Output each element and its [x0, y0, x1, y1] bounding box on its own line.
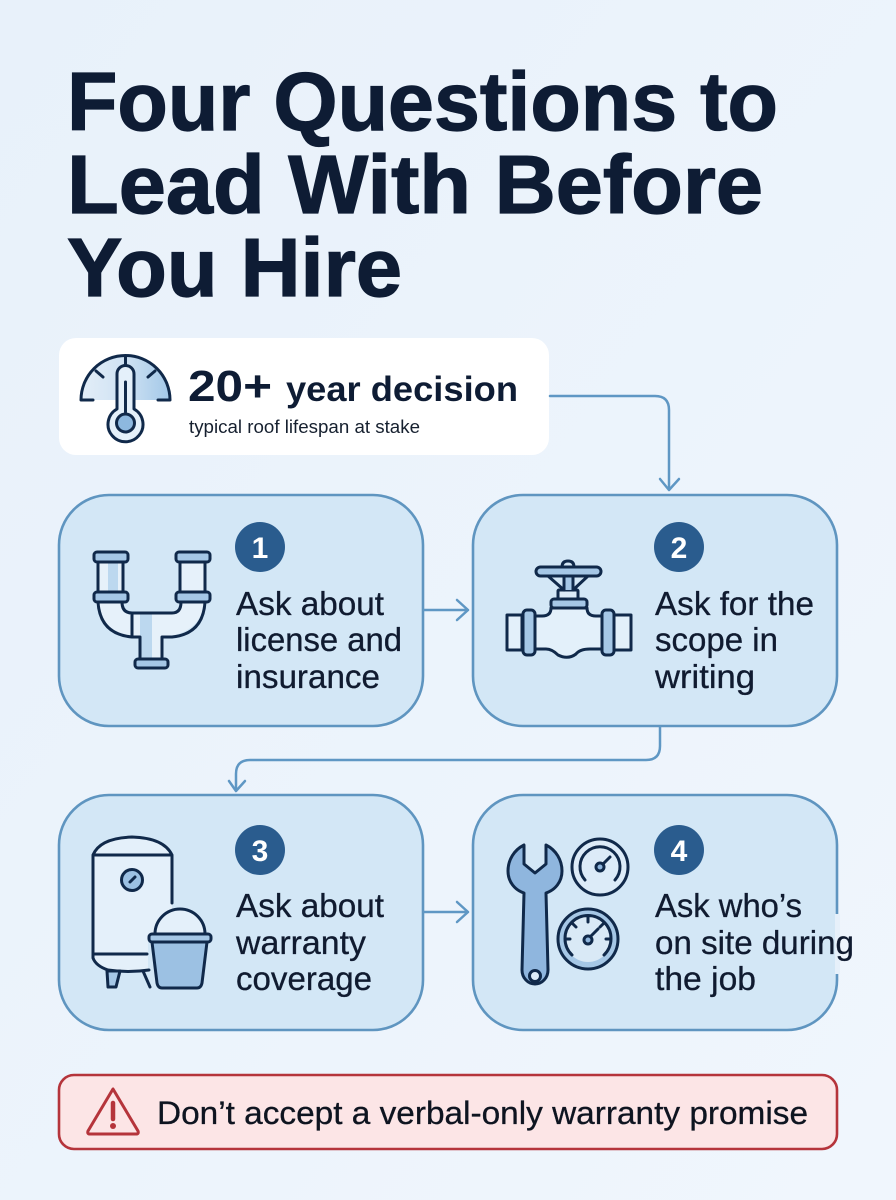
question 1 text: insurance — [236, 658, 380, 695]
icon: wrench and gauges — [508, 839, 628, 984]
question 4 text — [655, 887, 854, 997]
number badge 4: 4 — [671, 835, 688, 868]
stat headline: 20+ — [188, 362, 272, 411]
title: Four Questions to — [67, 55, 778, 148]
question 1 text: Ask about — [236, 585, 384, 622]
stat headline: year decision — [286, 370, 518, 409]
question 4 text: Ask who’s — [655, 887, 802, 924]
question 2 text: scope in — [655, 621, 778, 658]
question 1 text — [236, 585, 402, 695]
number badge 3: 3 — [252, 835, 268, 868]
arrow: card 2 to card 3 — [229, 727, 660, 791]
question 3 text — [235, 887, 384, 997]
warning text: Don’t accept a verbal-only warranty promise — [157, 1095, 808, 1131]
number badge 2: 2 — [671, 532, 687, 565]
question 2 text: writing — [654, 658, 755, 695]
number badge 1 — [235, 522, 285, 572]
panel: question 1 — [59, 495, 423, 726]
title: Lead With Before — [67, 138, 763, 231]
title — [67, 55, 778, 314]
icon: valve — [507, 561, 631, 657]
arrow: card 3 to card 4 — [424, 902, 468, 922]
title: You Hire — [67, 221, 402, 314]
question 2 text: Ask for the — [655, 585, 814, 622]
arrow: card 1 to card 2 — [424, 600, 468, 620]
panel: roof lifespan stat — [59, 338, 549, 455]
icon: gauge thermometer — [81, 356, 170, 442]
question 3 text: coverage — [236, 960, 372, 997]
number badge 4 — [654, 825, 704, 875]
arrow: stat to card 2 — [550, 396, 679, 490]
icon: branching pipes — [94, 552, 210, 668]
question 4 text: on site during — [655, 924, 854, 961]
icon: water heater and bucket — [93, 837, 211, 988]
stat caption: typical roof lifespan at stake — [189, 417, 420, 437]
panel: warning callout — [59, 1075, 837, 1149]
panel: question 3 — [59, 795, 423, 1030]
number badge 3 — [235, 825, 285, 875]
question 4 text: the job — [655, 960, 756, 997]
question 3 text: warranty — [235, 924, 367, 961]
panel: question 4 — [473, 795, 854, 1030]
stat headline — [188, 362, 518, 411]
icon: warning triangle — [88, 1089, 138, 1134]
question 3 text: Ask about — [236, 887, 384, 924]
question 1 text: license and — [236, 621, 402, 658]
number badge 1: 1 — [252, 532, 268, 565]
panel: question 2 — [473, 495, 837, 726]
question 2 text — [654, 585, 814, 695]
number badge 2 — [654, 522, 704, 572]
